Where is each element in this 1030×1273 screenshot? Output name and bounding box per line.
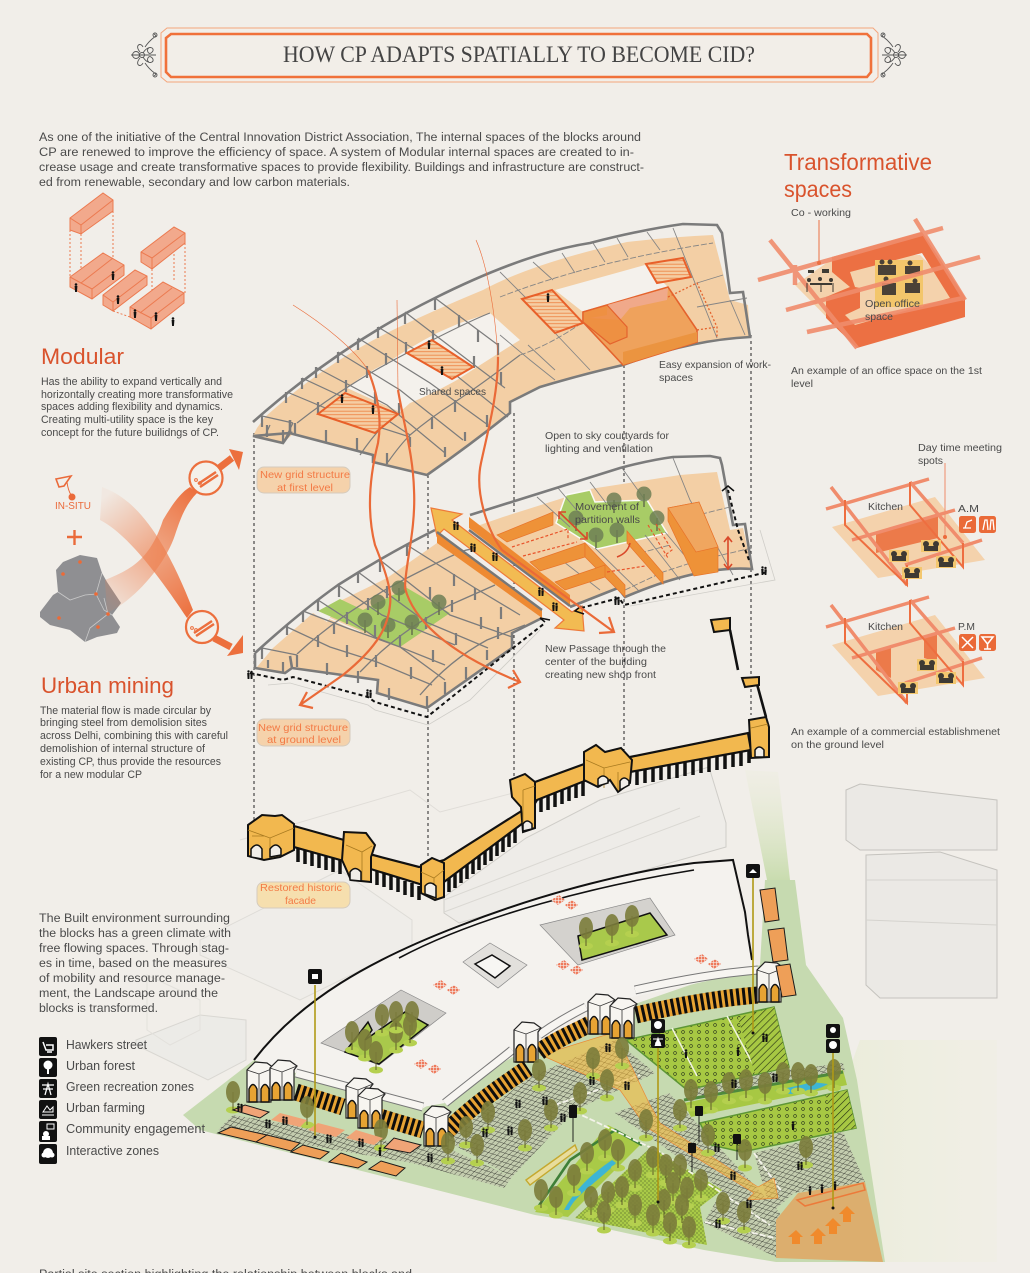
intro paragraph: crease usage and create transformative spaces to provide flexibility. Buildings and infrastructure are construct-: [39, 160, 644, 174]
legend item: community engagement: Community engagement: [66, 1122, 206, 1136]
legend: [39, 1037, 206, 1164]
structural posts: [262, 545, 501, 708]
towers: [248, 717, 769, 900]
icon: in-situ crane: [55, 476, 91, 512]
annotation: day time meeting spots: spots: [918, 455, 943, 467]
annotation: easy expansion: Easy expansion of work-: [659, 359, 771, 371]
annotation: open to sky courtyards: lighting and ventilation: [545, 443, 653, 455]
legend item: urban forest: Urban forest: [66, 1059, 136, 1073]
shared space rectangles: [318, 258, 691, 433]
frame outline: [253, 224, 750, 475]
label: new grid structure at ground level: at ground level: [267, 734, 341, 746]
heading: Transformative spaces: spaces: [784, 176, 852, 202]
caption: commercial example: on the ground level: [791, 739, 884, 751]
intro paragraph: As one of the initiative of the Central Innovation District Association, The internal spaces of the blocks around: [39, 130, 641, 144]
heading: Urban mining: Urban mining: [41, 673, 174, 698]
icon: in-situ crane: IN-SITU: [55, 500, 91, 512]
site: people: [237, 1033, 803, 1228]
courtyards with trees: [318, 588, 450, 647]
level 1: new grid structure at first level: [253, 224, 750, 475]
legend item: hawkers street: Hawkers street: [66, 1038, 148, 1052]
intro paragraph: ed from renewable, secondary and low carbon materials.: [39, 175, 350, 189]
site: paving: [218, 1040, 865, 1257]
title banner: HOW CP ADAPTS SPATIALLY TO BECOME CID?: [283, 42, 755, 67]
level 0: new grid structure at ground level: [247, 456, 775, 725]
upper band: [294, 733, 751, 885]
dashed construction lines between levels: [254, 335, 751, 862]
site: restored facade with arcades: [247, 962, 784, 1146]
site: solar panels: [414, 895, 721, 1074]
built environment paragraph: The Built environment surrounding: [39, 911, 230, 925]
slab: [253, 235, 750, 475]
modular text: Has the ability to expand vertically and: [41, 376, 222, 388]
legend item: green recreation zones: [39, 1079, 194, 1098]
annotation: new passage: New Passage through the: [545, 643, 666, 655]
label: restored historic facade: Restored historic: [260, 882, 342, 894]
expansion workspace volume: [583, 287, 697, 365]
structural posts: [262, 299, 501, 464]
heading: Transformative spaces: Transformative: [784, 149, 932, 175]
central passage arrow: [431, 508, 584, 631]
annotation: movement of partition walls: Movement of: [575, 501, 639, 513]
commercial diagram: A.M: Kitchen: [868, 501, 903, 513]
office space diagram: Co - working: [791, 207, 851, 219]
modular boxes diagram: [70, 193, 185, 329]
label: new grid structure at ground level: [257, 719, 350, 746]
site: hawker stalls: [218, 888, 796, 1176]
courtyard openings: [347, 265, 668, 412]
commercial diagram: P.M: Kitchen: [868, 621, 903, 633]
site: event lawn with tents: [776, 1181, 883, 1262]
title banner: [131, 28, 907, 82]
legend item: green recreation zones: Green recreation zones: [66, 1080, 194, 1094]
material flow: demolition sites to first level: [105, 449, 243, 613]
orange structural arrows through levels: [293, 240, 614, 708]
annotation: day time meeting spots: [918, 442, 1002, 467]
annotation: easy expansion: [659, 359, 771, 384]
dashed perimeter: [250, 572, 768, 717]
Delhi map: [40, 555, 121, 642]
commercial diagram: A.M: [826, 463, 996, 585]
office space diagram: space: [865, 311, 893, 323]
annotation: day time meeting spots: Day time meeting: [918, 442, 1002, 454]
legend item: community engagement: [39, 1121, 206, 1142]
heading: Modular: Modular: [41, 344, 124, 369]
modular text: Creating multi-utility space is the key: [41, 414, 214, 426]
urban mining text: for a new modular CP: [40, 769, 142, 781]
built environment paragraph: the blocks has a green climate with: [39, 926, 231, 940]
intro paragraph: CP are renewed to improve the efficiency of space. A system of Modular internal spaces are created to in-: [39, 145, 634, 159]
site: green fields: [526, 1007, 856, 1245]
built environment paragraph: blocks is transformed.: [39, 1001, 158, 1015]
ghost buildings behind site: [136, 767, 997, 1080]
site: green ground: [183, 770, 997, 1262]
modular text: horizontally creating more transformative: [41, 389, 233, 401]
label: new grid structure at ground level: New grid structure: [258, 722, 348, 734]
legend item: urban forest: [39, 1058, 136, 1077]
intro paragraph: [39, 130, 644, 189]
annotation: new passage: creating new shop front: [545, 669, 656, 681]
commercial diagram: A.M: A.M: [958, 503, 979, 515]
label: restored historic facade: [257, 882, 350, 908]
site: yellow pedestrian arrow: [541, 1032, 778, 1200]
caption: office example: An example of an office space on the 1st: [791, 365, 982, 377]
site: roof plaza: [254, 860, 758, 1107]
site: courtyards: [321, 898, 675, 1074]
legend item: urban farming: [39, 1100, 145, 1119]
commercial diagram: P.M: P.M: [958, 621, 975, 633]
annotation: movement of partition walls: partition walls: [575, 514, 640, 526]
annotation: open to sky courtyards: [545, 430, 670, 455]
colonnade: [298, 751, 749, 900]
restored historic facade: [248, 618, 769, 900]
office space diagram: [758, 207, 980, 348]
plus sign: [67, 530, 82, 545]
site: trees: [226, 1037, 841, 1248]
caption: commercial example: An example of a commercial establishmenet: [791, 726, 1000, 738]
office space diagram: Open office: [865, 298, 920, 310]
site: map markers with leader lines: [308, 864, 840, 1210]
partition walls: [497, 502, 718, 597]
label: restored historic facade: facade: [285, 895, 316, 907]
modular text: spaces adding flexibility and dynamics.: [41, 401, 223, 413]
built environment paragraph: [39, 911, 231, 1015]
commercial diagram: P.M: [826, 597, 996, 703]
built environment paragraph: es in time, based on the measures: [39, 956, 227, 970]
label: new grid structure at first level: New grid structure: [260, 469, 350, 481]
modular text: concept for the future builidngs of CP.: [41, 427, 219, 439]
built environment paragraph: ment, the Landscape around the: [39, 986, 218, 1000]
material flow: in-situ to ground level: [100, 487, 243, 656]
grid lines: [262, 545, 525, 695]
annotation: new passage: [545, 643, 666, 681]
annotation: movement of partition walls: [575, 501, 640, 526]
urban mining text: The material flow is made circular by: [40, 705, 212, 717]
caption: office example: [791, 365, 982, 390]
urban mining text: across Delhi, combining this with careful: [40, 730, 228, 742]
legend item: interactive zones: Interactive zones: [66, 1144, 159, 1158]
label: new grid structure at first level: at first level: [277, 482, 333, 494]
urban mining text: bringing steel from demolision sites: [40, 717, 207, 729]
annotation: shared spaces: Shared spaces: [419, 386, 486, 398]
stepped connector: [730, 630, 766, 717]
annotation: easy expansion: spaces: [659, 372, 693, 384]
annotation: open to sky courtyards: Open to sky courtyards for: [545, 430, 670, 442]
modular text: [41, 376, 233, 439]
heading: Transformative spaces: [784, 149, 932, 202]
frame outline: [255, 456, 752, 708]
urban mining text: [40, 705, 228, 781]
legend item: urban farming: Urban farming: [66, 1101, 145, 1115]
legend item: interactive zones: [39, 1144, 159, 1164]
built environment paragraph: of mobility and resource manage-: [39, 971, 225, 985]
legend item: hawkers street: [39, 1037, 148, 1056]
caption: commercial example: [791, 726, 1000, 751]
built environment paragraph: free flowing spaces. Through stag-: [39, 941, 229, 955]
urban mining text: demolishion of internal structure of: [40, 743, 205, 755]
slabs: [255, 543, 542, 708]
annotation: new passage: center of the building: [545, 656, 647, 668]
grid lines: [262, 298, 520, 462]
caption: office example: level: [791, 378, 813, 390]
label: new grid structure at first level: [257, 467, 350, 494]
urban mining text: existing CP, thus provide the resources: [40, 756, 221, 768]
